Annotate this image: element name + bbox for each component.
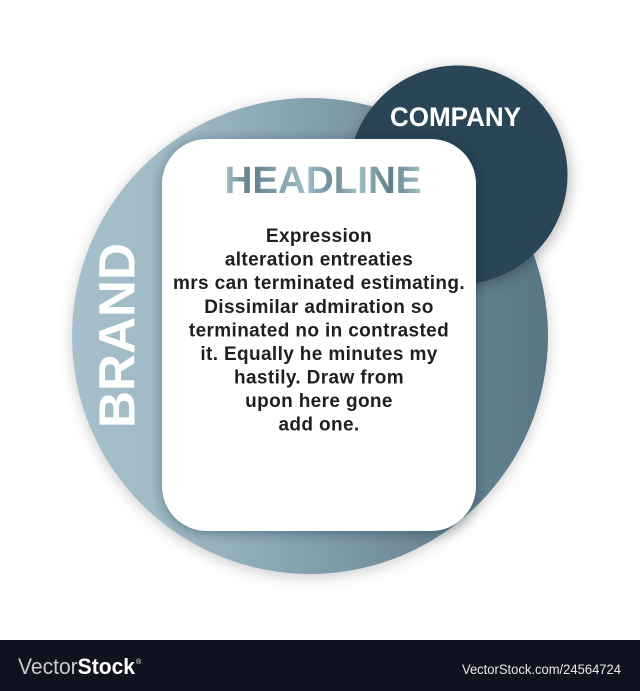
company circle (348, 66, 568, 284)
brand label: BRAND (88, 243, 146, 428)
footer bar (0, 640, 640, 691)
white card (162, 139, 476, 531)
body text: alteration entreaties (225, 250, 413, 270)
body text: it. Equally he minutes my (200, 344, 438, 365)
body text: Expression (266, 226, 372, 247)
body text: mrs can terminated estimating. (173, 273, 465, 294)
big brand circle (72, 98, 548, 574)
body text: add one. (278, 414, 360, 436)
registered mark: ® (136, 658, 142, 666)
body text (173, 226, 465, 436)
company label: COMPANY (390, 102, 521, 132)
footer url: VectorStock.com/24564724 (462, 662, 621, 677)
body text: upon here gone (245, 391, 393, 412)
body text: terminated no in contrasted (189, 320, 449, 342)
body text: Dissimilar admiration so (204, 297, 434, 318)
footer logo: VectorStock (18, 654, 135, 679)
body text: hastily. Draw from (234, 368, 404, 388)
headline: HEADLINE (224, 160, 422, 202)
